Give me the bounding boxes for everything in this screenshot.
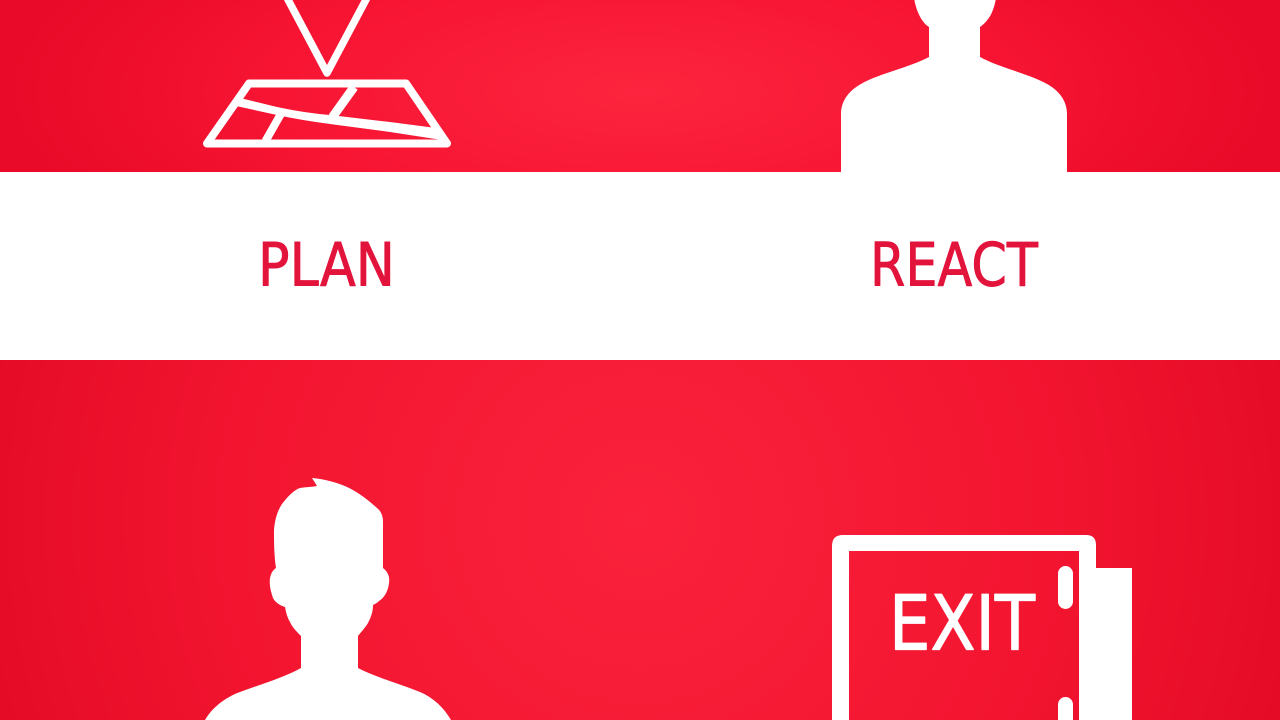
door handle lower xyxy=(1058,697,1073,720)
heading: PLAN: PLAN xyxy=(258,230,395,300)
exit sign text: EXIT xyxy=(889,578,1035,668)
white label band xyxy=(0,172,1280,360)
icon: person head and shoulders xyxy=(205,478,451,720)
icon: exit door xyxy=(832,535,1132,720)
icon: person silhouette, react xyxy=(841,0,1067,172)
door frame xyxy=(832,535,1132,720)
top red panel xyxy=(0,0,1280,172)
bottom red panel xyxy=(0,360,1280,720)
heading: REACT: REACT xyxy=(870,230,1038,300)
icon: map with location pin xyxy=(207,0,447,144)
door handle upper xyxy=(1058,566,1073,609)
